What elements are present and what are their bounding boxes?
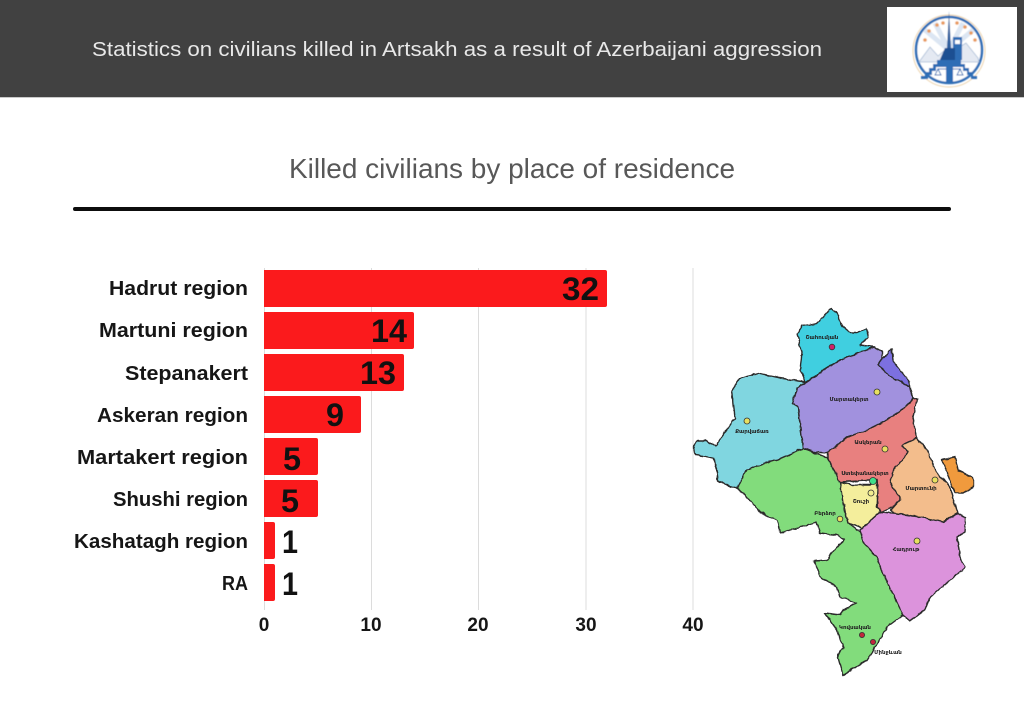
axis labels: 0 <box>259 615 269 636</box>
section heading: Killed civilians by place of residence <box>289 153 735 184</box>
region: Askeran <box>828 398 917 512</box>
map place names: Շահումյան <box>806 335 839 341</box>
bar values: 1 <box>282 524 298 560</box>
category labels: Hadrut region <box>109 278 248 300</box>
bar values <box>281 271 599 602</box>
bar values: 13 <box>360 355 396 391</box>
category labels: Kashatagh region <box>74 531 248 553</box>
header title: Statistics on civilians killed in Artsakh as a result of Azerbaijani aggression <box>92 38 822 61</box>
region: Hadrut <box>860 512 966 621</box>
map place names: Մարտակերտ <box>829 397 869 403</box>
axis labels: 10 <box>360 615 382 636</box>
axis labels: 20 <box>467 615 489 636</box>
bar values: 5 <box>281 483 299 519</box>
category labels <box>74 278 248 595</box>
header band <box>0 0 1024 98</box>
region: Shahumyan <box>797 309 875 382</box>
bar values: 32 <box>562 271 599 307</box>
region shapes <box>693 309 973 675</box>
map place names: Ասկերան <box>854 440 882 446</box>
bar values: 1 <box>282 566 298 602</box>
map place names: Մարտունի <box>905 486 937 492</box>
region: Kashatagh <box>693 373 805 488</box>
heading rule <box>73 207 951 211</box>
map place names: Շուշի <box>853 499 870 505</box>
map place names: Ստեփանակերտ <box>841 471 889 477</box>
bar values: 14 <box>371 313 407 349</box>
map place names: Հադրութ <box>893 547 920 553</box>
category labels: Martuni region <box>99 320 248 342</box>
axis labels <box>259 615 704 636</box>
region: Martakert <box>792 347 913 453</box>
region: Shushi <box>840 480 880 528</box>
map place names: Մինջևան <box>874 650 902 656</box>
map place names: Քարվաճառ <box>735 429 769 435</box>
map of Artsakh regions <box>693 309 973 675</box>
bars <box>264 270 607 601</box>
map place names: Կովսական <box>839 625 871 631</box>
category labels: Stepanakert <box>125 363 248 385</box>
axis labels: 40 <box>682 615 704 636</box>
region: Orange enclave <box>942 457 973 493</box>
bar values: 5 <box>283 441 301 477</box>
bar values: 9 <box>326 397 344 433</box>
bar chart <box>74 268 704 636</box>
axis labels: 30 <box>575 615 597 636</box>
category labels: Martakert region <box>77 447 248 469</box>
region: Martuni <box>890 438 958 522</box>
category labels: Shushi region <box>113 489 248 511</box>
region: northeast enclave <box>878 349 910 387</box>
map place names: Բերձոր <box>814 511 836 517</box>
logo emblem <box>887 7 1017 92</box>
category labels: RA <box>222 573 248 595</box>
settlement markers <box>744 344 938 645</box>
category labels: Askeran region <box>97 405 248 427</box>
map place names <box>735 335 937 656</box>
region: Kashatagh south and Hadrut west <box>737 448 903 675</box>
